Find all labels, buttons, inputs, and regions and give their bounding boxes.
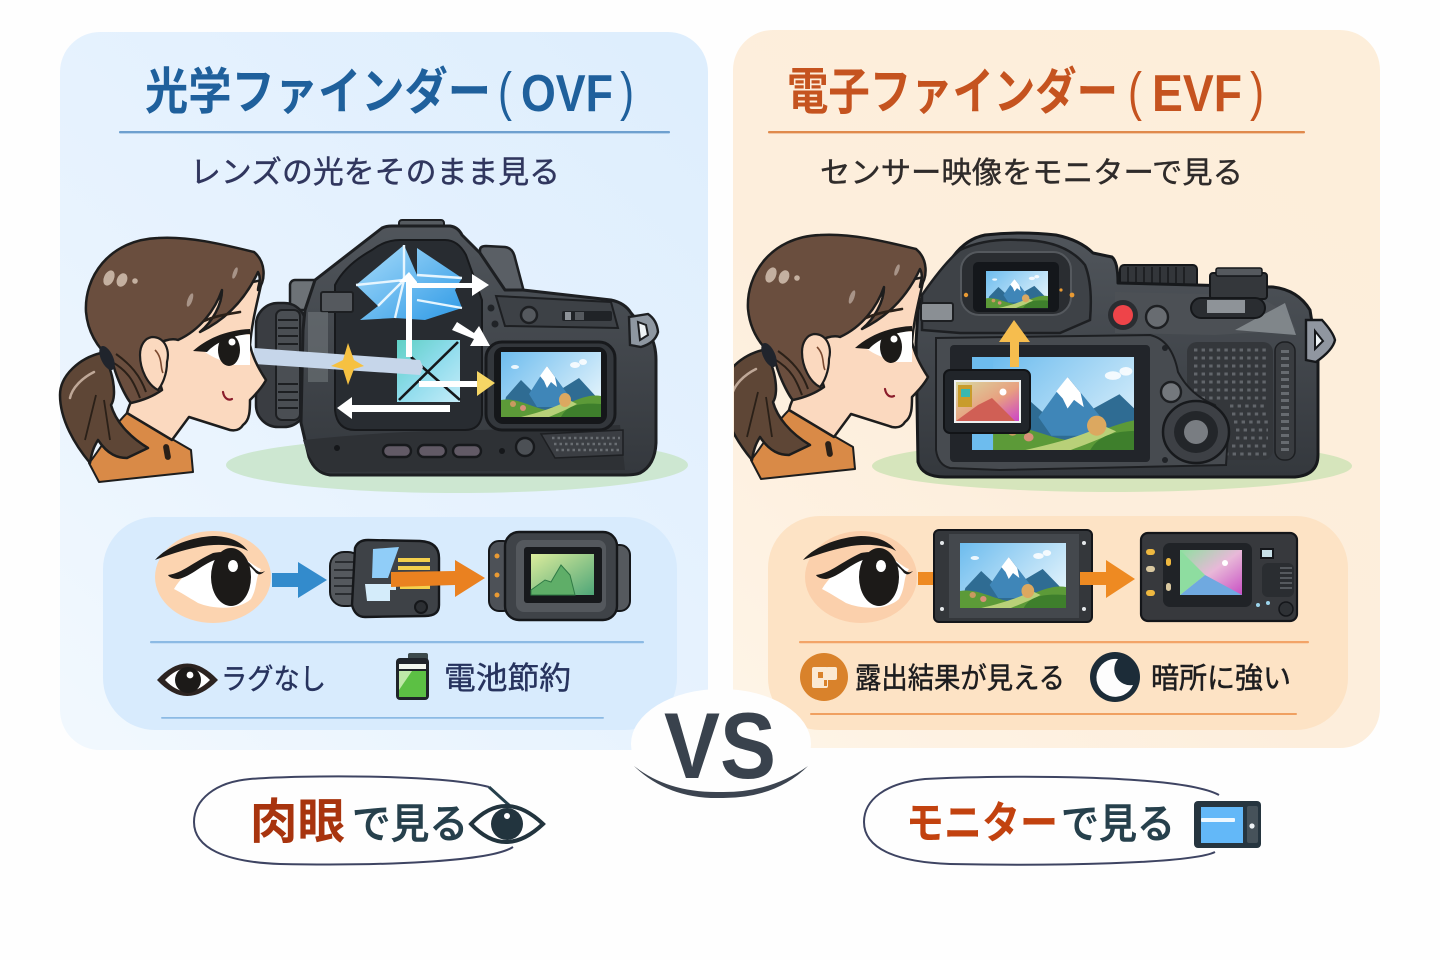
callout: see with naked eye: 肉眼 bbox=[250, 796, 345, 849]
title: EVF: ( bbox=[1128, 62, 1142, 122]
title: EVF: ) bbox=[1250, 62, 1264, 122]
strap lug bbox=[629, 314, 658, 347]
white arrows bbox=[337, 272, 490, 419]
illustration: ground bbox=[226, 437, 688, 493]
title: OVF: ( bbox=[498, 62, 512, 122]
text: exposure preview: 露出結果が見える bbox=[855, 662, 1065, 695]
icon: EVF camera bbox=[1141, 533, 1297, 621]
grip texture bbox=[541, 430, 623, 458]
blue prism bbox=[356, 245, 462, 320]
strap lug bbox=[1306, 320, 1335, 362]
icon: eye small bbox=[157, 664, 218, 696]
light beam bbox=[254, 348, 423, 375]
dial bbox=[1163, 401, 1229, 463]
icon: eye bbox=[803, 531, 917, 623]
subtitle: EVF: センサー映像をモニターで見る bbox=[820, 157, 1243, 190]
icon: monitor bbox=[1194, 801, 1261, 848]
mirror bbox=[397, 340, 460, 402]
eyecup bbox=[922, 240, 1091, 333]
illustration: DSLR camera with prism bbox=[254, 220, 658, 475]
text: no lag: ラグなし bbox=[221, 663, 326, 696]
illustration: mirrorless camera bbox=[916, 233, 1335, 477]
title: OVF: OVF bbox=[521, 65, 613, 123]
VS badge: VS bbox=[664, 693, 776, 798]
illustration: woman looking through viewfinder bbox=[60, 238, 266, 482]
illustration: woman looking at viewfinder bbox=[722, 235, 928, 479]
grip texture bbox=[1187, 342, 1273, 460]
illustration: ground bbox=[872, 440, 1352, 492]
arrow: orange bbox=[1080, 560, 1135, 598]
callout: see on monitor: で見る bbox=[1061, 801, 1175, 847]
subtitle: OVF: レンズの光をそのまま見る bbox=[190, 155, 560, 190]
icon: OVF camera bbox=[330, 540, 439, 617]
rear screen bbox=[486, 342, 615, 430]
rear screen bbox=[950, 345, 1150, 462]
arrow: orange stub bbox=[918, 572, 935, 585]
arrow: yellow up bbox=[999, 320, 1030, 367]
text: strong in dark: 暗所に強い bbox=[1151, 662, 1291, 695]
callout: see with naked eye: で見る bbox=[352, 801, 468, 847]
text: battery saving: 電池節約 bbox=[444, 661, 571, 696]
panel: EVF summary box bbox=[768, 516, 1348, 730]
callout: see with naked eye bbox=[194, 776, 543, 864]
back panel bbox=[936, 335, 1228, 470]
buttons bbox=[1108, 300, 1138, 330]
callout: see on monitor bbox=[864, 777, 1261, 865]
inset sensor image bbox=[944, 370, 1030, 433]
infographic: OVF vs EVF bbox=[58, 30, 1380, 866]
callout: see on monitor: モニター bbox=[906, 799, 1058, 848]
title: OVF: 光学ファインダー bbox=[145, 64, 491, 120]
icon: monitor bbox=[934, 530, 1092, 622]
buttons bbox=[383, 445, 481, 457]
panel: OVF summary box bbox=[103, 517, 677, 730]
icon: eye bbox=[155, 531, 271, 623]
icon: OVF viewfinder screen bbox=[489, 532, 630, 620]
title: EVF: 電子ファインダー bbox=[787, 64, 1118, 120]
arrow: orange bbox=[391, 560, 485, 597]
icon: moon bbox=[1090, 652, 1140, 702]
icon: battery bbox=[396, 653, 429, 700]
arrow: blue bbox=[272, 562, 327, 598]
panel: optical viewfinder bbox=[60, 32, 708, 750]
icon: eye bbox=[471, 787, 543, 842]
icon: info badge bbox=[800, 653, 848, 701]
VS badge bbox=[631, 689, 811, 799]
title: EVF: EVF bbox=[1152, 65, 1242, 123]
panel: electronic viewfinder bbox=[722, 30, 1380, 748]
title: OVF: ) bbox=[620, 62, 634, 122]
